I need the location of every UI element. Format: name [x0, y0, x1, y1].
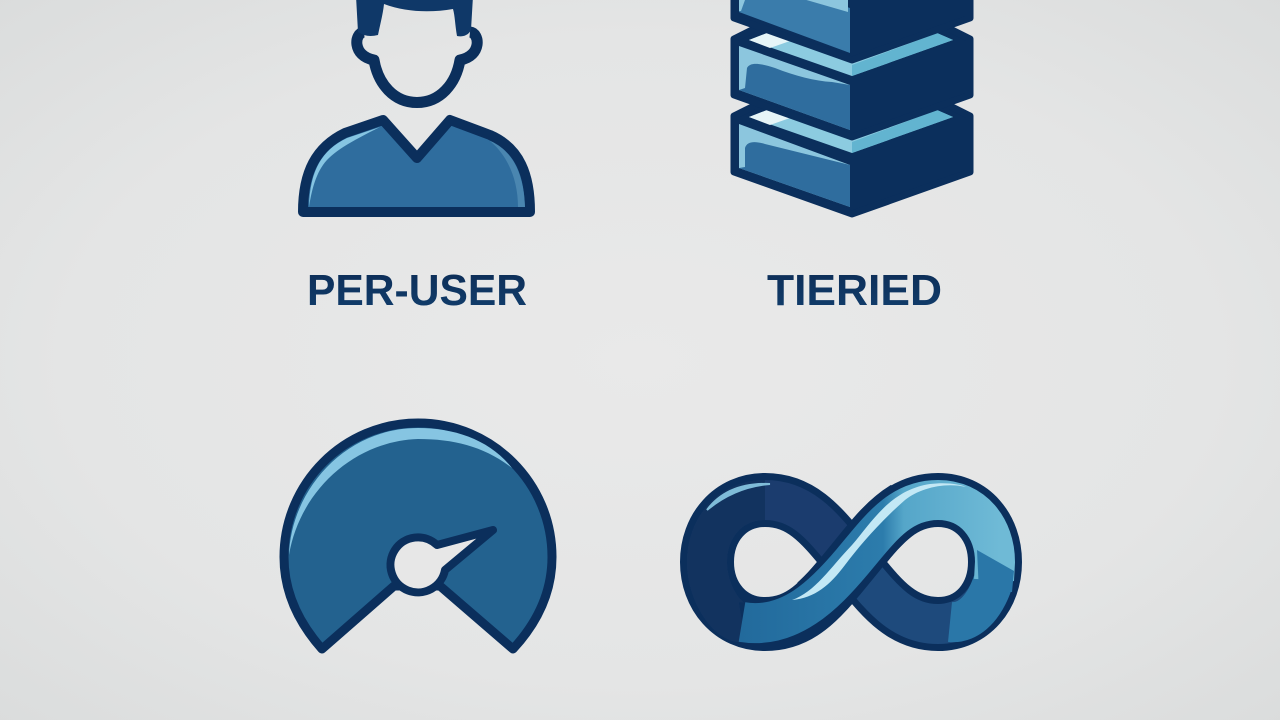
icon: usage gauge — [284, 423, 552, 649]
infinity outline — [707, 500, 995, 624]
top tier — [734, 0, 970, 60]
left loop highlight — [707, 484, 770, 510]
person head outline — [357, 32, 477, 102]
right lobe colour break — [977, 550, 1014, 592]
rising strand colour — [742, 500, 995, 623]
icon: per-user person — [303, 0, 530, 212]
left loop shade — [707, 500, 765, 622]
icon: tiered stack — [734, 0, 970, 214]
person torso — [303, 120, 530, 212]
left loop band — [707, 500, 852, 622]
torso highlight — [309, 127, 380, 207]
rising strand outline — [815, 508, 905, 603]
gauge dial — [284, 423, 552, 649]
label: tiered: TIERIED — [767, 266, 942, 315]
torso right shade — [490, 141, 525, 207]
label: per-user: PER-USER — [307, 266, 527, 315]
dial highlight — [289, 428, 512, 555]
gauge needle and hub — [390, 530, 493, 592]
strand highlight — [792, 483, 966, 600]
person hair — [356, 0, 473, 36]
lower right band — [852, 562, 992, 624]
middle tier — [734, 29, 970, 137]
bottom tier — [734, 106, 970, 214]
icon: infinity loop — [707, 483, 1014, 624]
lower right blue band — [950, 582, 993, 622]
